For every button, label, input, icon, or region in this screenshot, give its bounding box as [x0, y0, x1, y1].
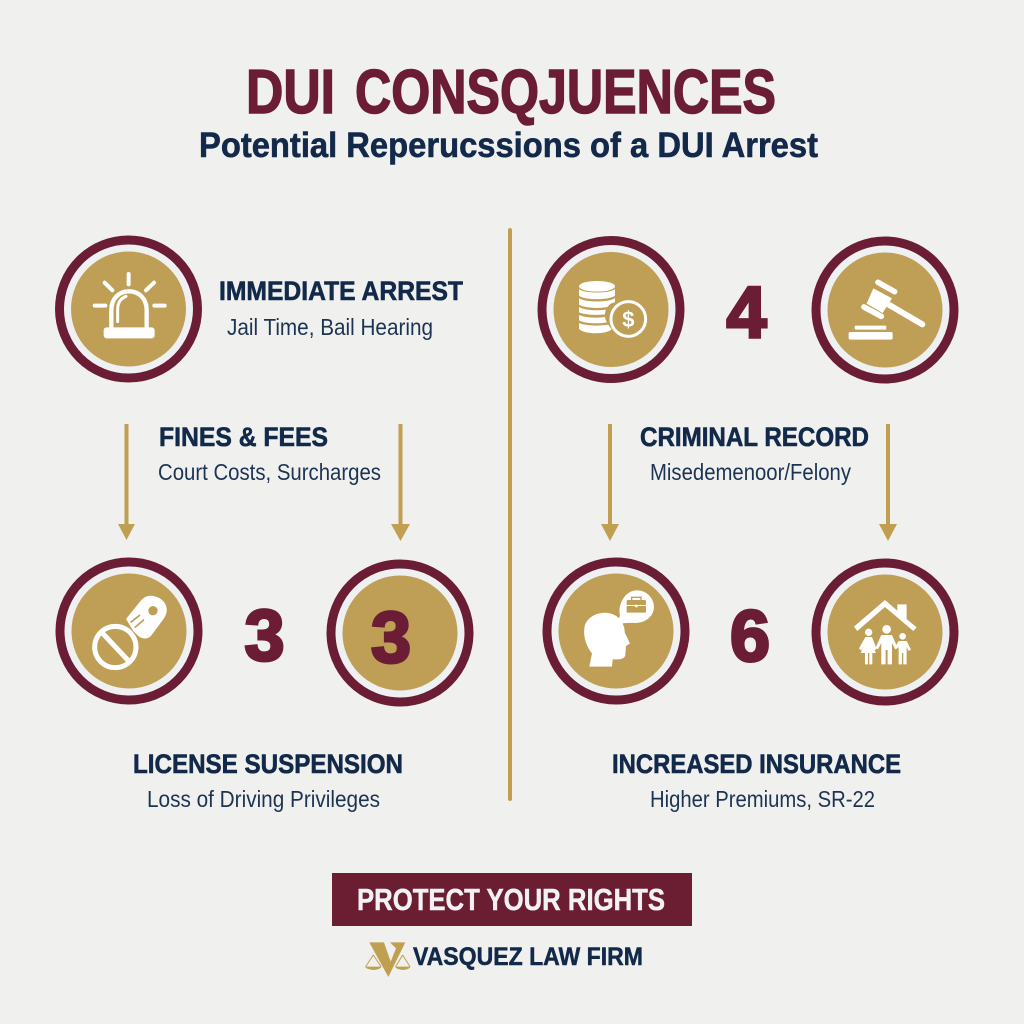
title: DUI: [246, 58, 335, 127]
arrow: [879, 424, 897, 541]
call to action banner: [332, 873, 692, 926]
text: misdemeanor: Misedemenoor/Felony: [650, 459, 851, 485]
icon: coins: $: [622, 307, 634, 332]
icon: gavel: [812, 236, 958, 384]
heading: license suspension: LICENSE SUSPENSION: [133, 749, 403, 779]
title: [246, 58, 776, 127]
icon: head with briefcase speech bubble: [542, 558, 690, 704]
brand name: VASQUEZ LAW FIRM: [413, 943, 643, 971]
text: loss of driving privileges: Loss of Driving Privileges: [147, 786, 380, 812]
arrow: [601, 424, 619, 541]
icon: coins: [538, 236, 684, 383]
text: higher premiums: Higher Premiums, SR-22: [650, 786, 875, 812]
subtitle: Potential Reperucssions of a DUI Arrest: [199, 126, 818, 165]
icon: license key with prohibition sign: [56, 558, 202, 704]
number 4: 4: [726, 273, 767, 353]
arrow: [391, 424, 410, 541]
center divider: [508, 228, 512, 801]
circle with number 3: [326, 560, 474, 706]
heading: immediate arrest: IMMEDIATE ARREST: [219, 276, 463, 306]
heading: fines and fees: FINES & FEES: [159, 422, 328, 452]
arrow: [118, 424, 135, 540]
call to action banner: PROTECT YOUR RIGHTS: [357, 882, 665, 917]
logo: V with scales: [365, 942, 411, 977]
heading: criminal record: CRIMINAL RECORD: [640, 422, 869, 452]
text: jail time: Jail Time, Bail Hearing: [227, 314, 433, 340]
number 3: 3: [244, 596, 285, 676]
heading: increased insurance: INCREASED INSURANCE: [612, 749, 901, 779]
icon: siren: [55, 236, 202, 382]
title: CONSQJUENCES: [355, 58, 776, 127]
circle with number 3: 3: [371, 598, 411, 678]
number 6: 6: [730, 597, 770, 677]
text: court costs: Court Costs, Surcharges: [158, 459, 381, 485]
icon: family under house roof: [812, 558, 958, 706]
